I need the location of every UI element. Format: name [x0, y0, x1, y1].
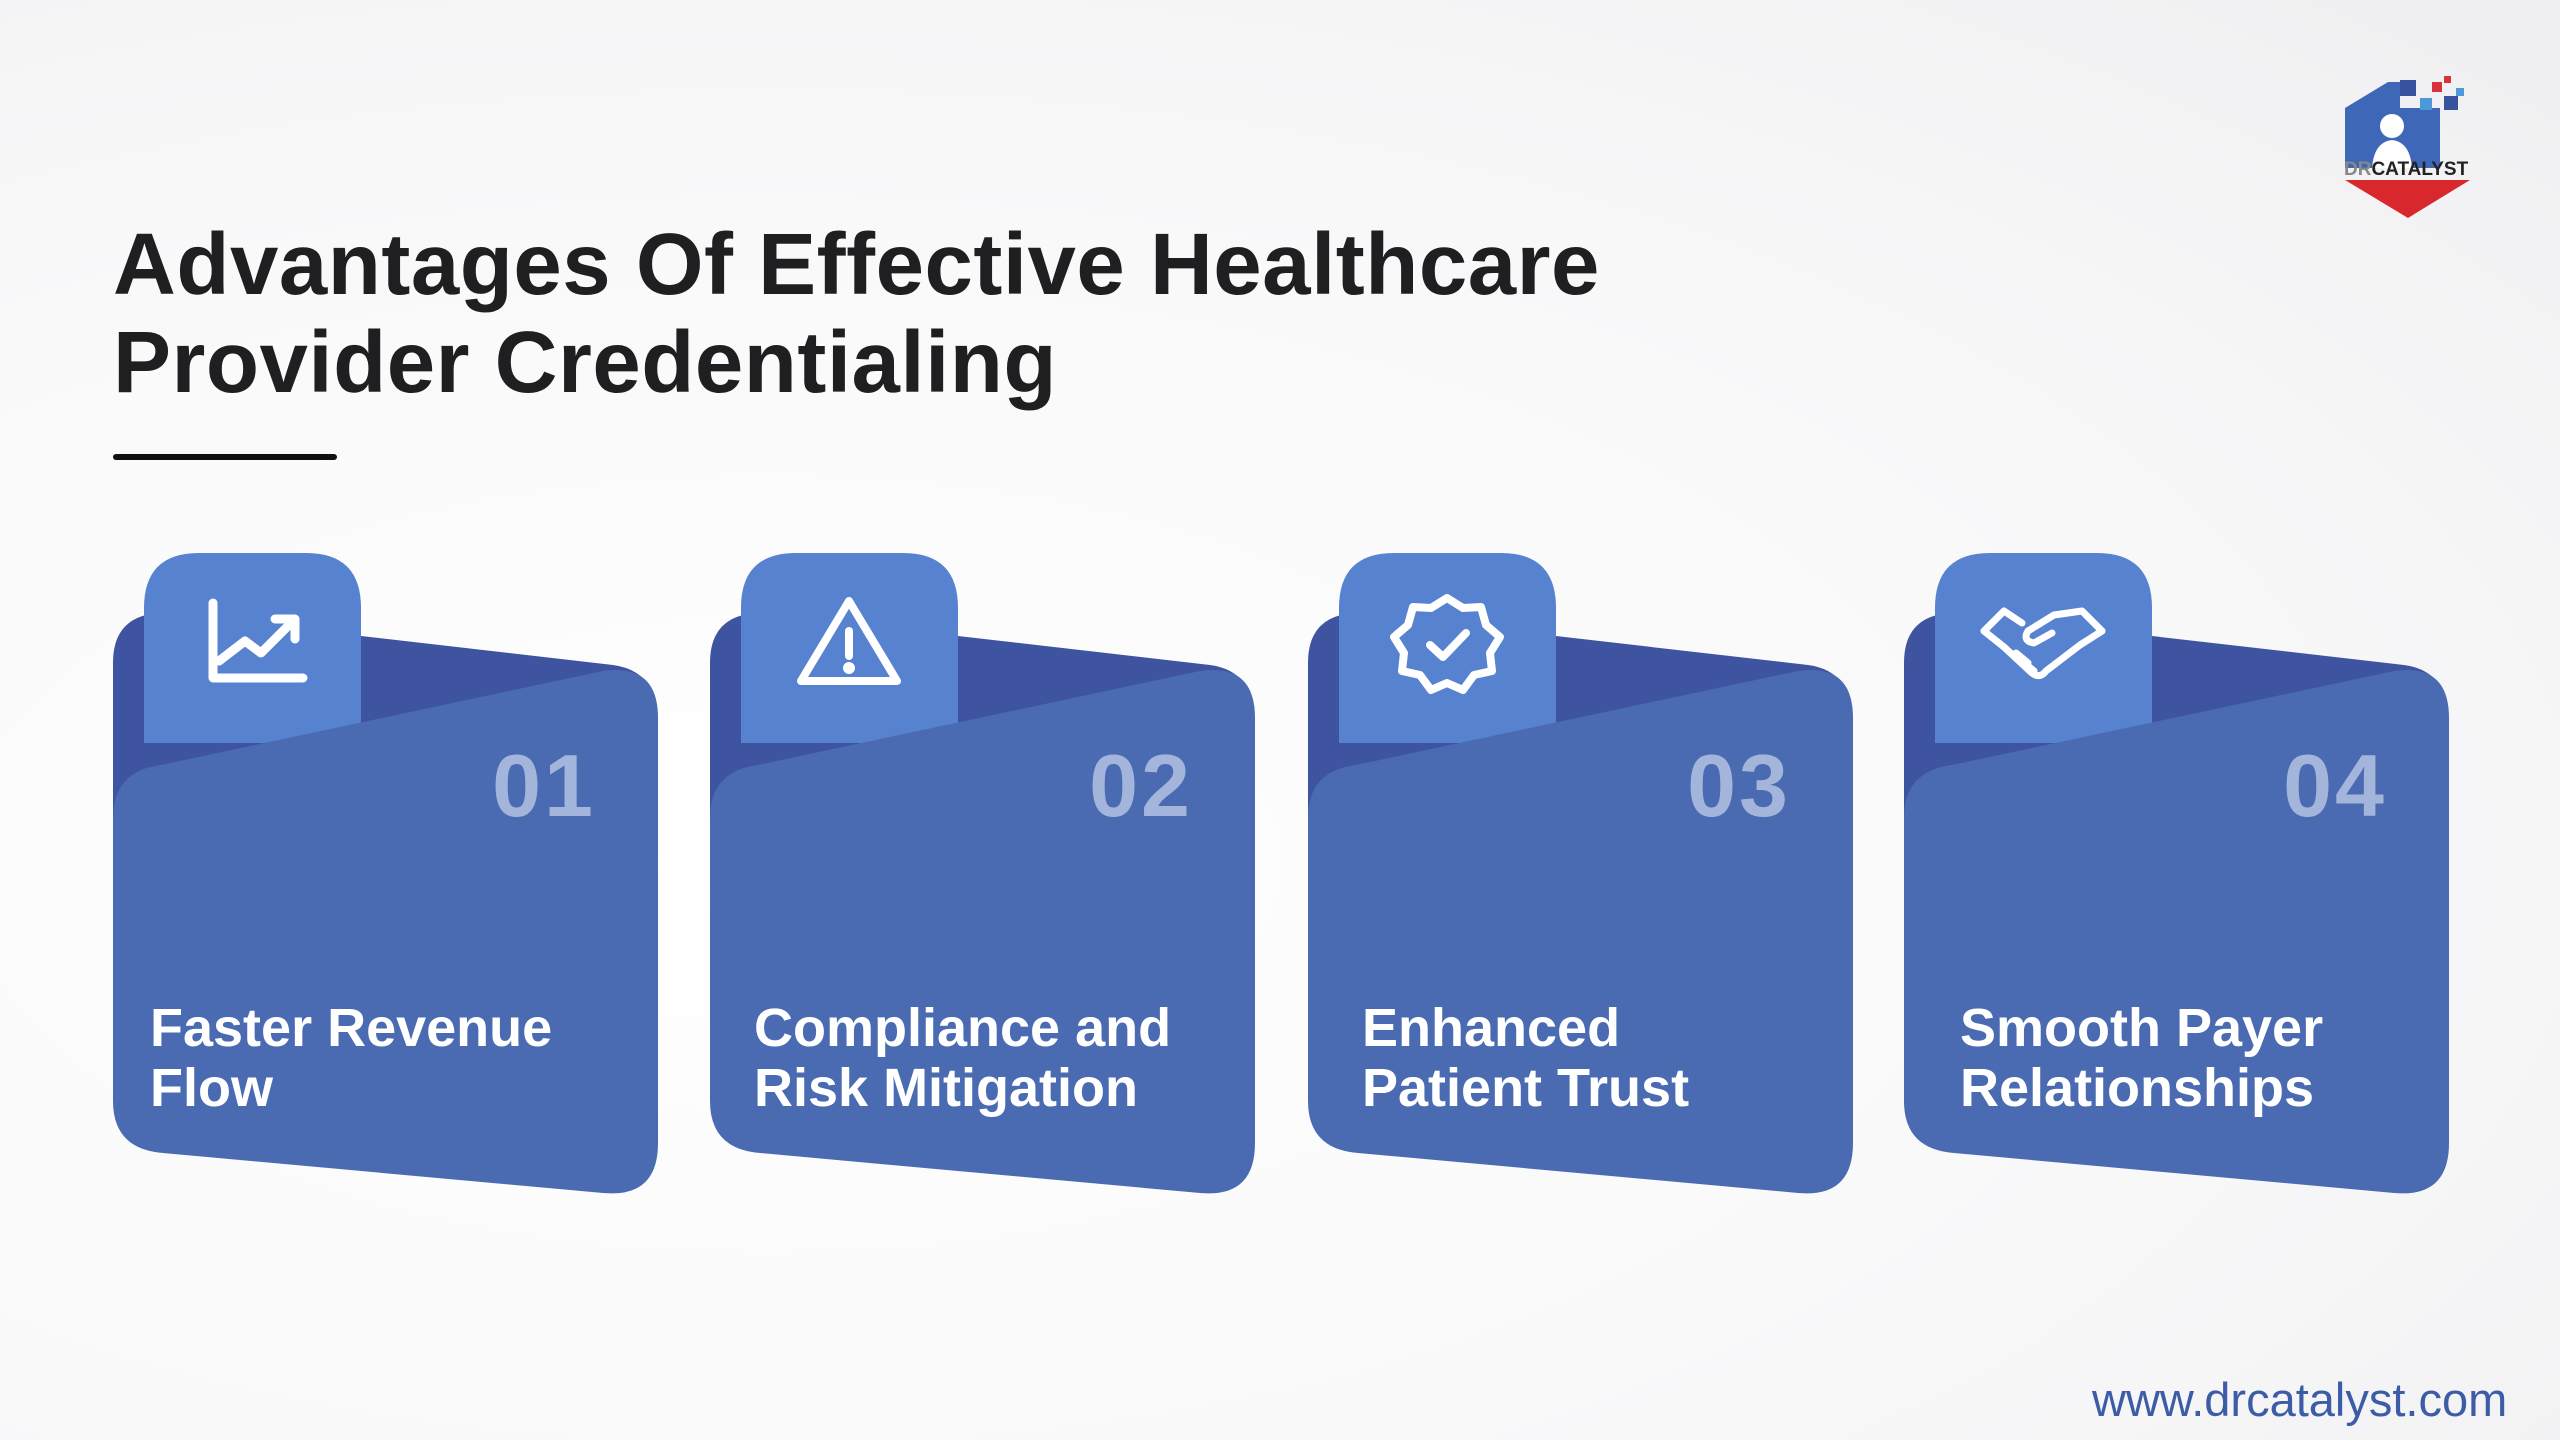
- title: [113, 216, 1600, 411]
- card 1: [113, 553, 658, 1194]
- card 1: 01: [492, 736, 596, 835]
- card 3: [1308, 553, 1853, 1194]
- label: Flow: [150, 1058, 273, 1118]
- icon: growth chart: [213, 603, 303, 678]
- card 4: 04: [2283, 736, 2387, 835]
- card 3: 03: [1687, 736, 1791, 835]
- icon: verified badge: [1394, 598, 1500, 690]
- logo: DRCATALYST: [2344, 159, 2469, 180]
- card 2: 02: [1089, 736, 1193, 835]
- label: Relationships: [1960, 1058, 2314, 1118]
- card 4: [1904, 553, 2449, 1194]
- label: [150, 998, 552, 1118]
- label: [1362, 998, 1689, 1118]
- card 2: [710, 553, 1255, 1194]
- icon: warning: [801, 601, 897, 681]
- title: Provider Credentialing: [113, 314, 1057, 411]
- title: Advantages Of Effective Healthcare: [113, 216, 1600, 313]
- label: Patient Trust: [1362, 1058, 1689, 1118]
- label: Risk Mitigation: [754, 1058, 1138, 1118]
- label: Enhanced: [1362, 998, 1620, 1058]
- icon: handshake: [1984, 611, 2102, 676]
- label: [754, 998, 1171, 1118]
- label: [1960, 998, 2323, 1118]
- logo: [2344, 76, 2470, 218]
- label: Smooth Payer: [1960, 998, 2323, 1058]
- website: www.drcatalyst.com: [2092, 1373, 2507, 1426]
- label: Compliance and: [754, 998, 1171, 1058]
- label: Faster Revenue: [150, 998, 552, 1058]
